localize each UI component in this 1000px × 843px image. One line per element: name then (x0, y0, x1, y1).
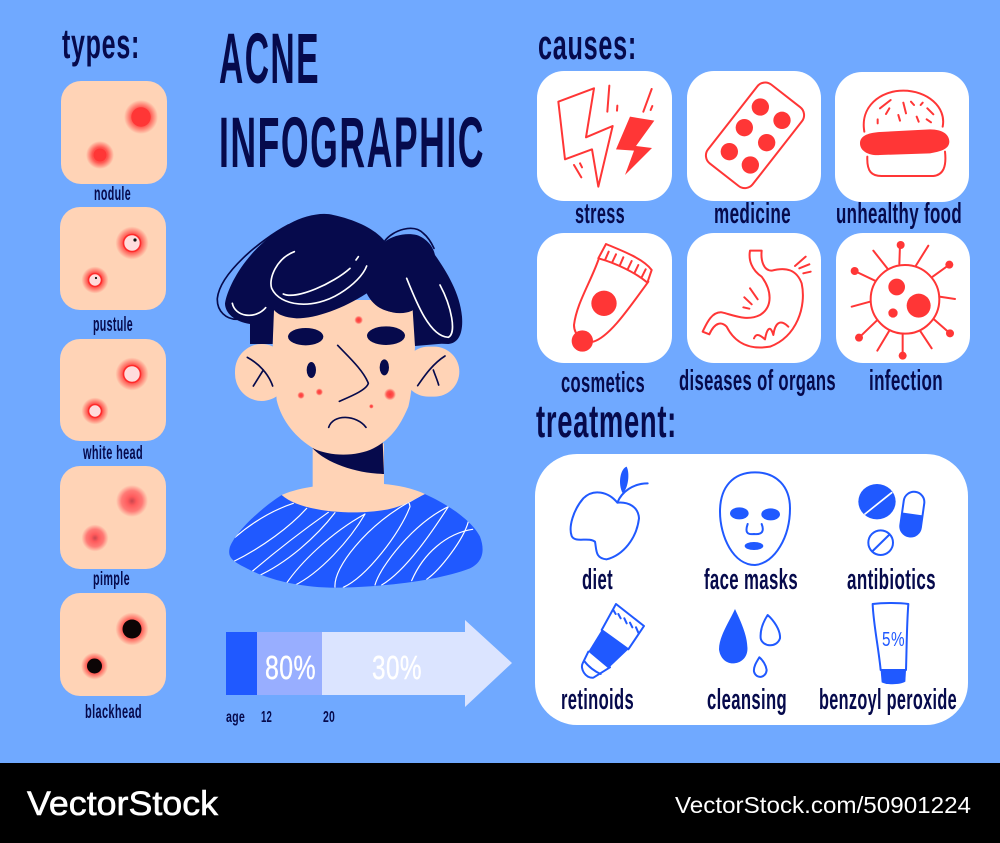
segment under 12 (226, 632, 257, 695)
neck and shoulders (282, 443, 425, 512)
panel: pustule (60, 207, 166, 336)
percent labels (265, 649, 422, 686)
icon: diet: diet (582, 564, 613, 596)
panel: blackhead (60, 593, 166, 723)
panel: cosmetics (537, 233, 672, 399)
icon: face masks: face masks (704, 564, 798, 596)
shirt (229, 493, 483, 588)
panel: pimple: pimple (93, 569, 130, 590)
icon: face masks (704, 472, 798, 596)
ears (235, 344, 459, 401)
panel: unhealthy food (835, 72, 969, 230)
percent labels: 80% (265, 649, 316, 686)
panel: stress (537, 71, 672, 230)
nose, mouth, ear lines (247, 345, 445, 427)
icon: antibiotics: antibiotics (847, 564, 936, 596)
age axis labels: age (226, 709, 245, 726)
icon: cleansing (707, 609, 787, 716)
panel: nodule: nodule (94, 184, 131, 205)
icon: benzoyl peroxide (819, 603, 957, 716)
footer bar: VectorStock (27, 785, 219, 823)
panel: diseases of organs: diseases of organs (679, 365, 836, 397)
heading: types: types: (62, 20, 140, 67)
title: INFOGRAPHIC (219, 104, 485, 183)
icon: retinoids (561, 604, 644, 716)
icon: benzoyl peroxide: 5% (882, 629, 905, 651)
panel: stress: stress (575, 198, 625, 230)
icon: retinoids: retinoids (561, 684, 634, 716)
panel: infection (836, 233, 970, 397)
age axis labels: 12 (261, 709, 272, 726)
panel: medicine (687, 71, 821, 230)
hair outlines (217, 225, 434, 319)
panel: pustule: pustule (93, 314, 133, 336)
panel: treatment (535, 454, 968, 725)
character illustration (217, 214, 483, 588)
panel: diseases of organs (679, 233, 836, 397)
icon: antibiotics (847, 484, 936, 596)
face (273, 300, 415, 455)
panel: pimple (60, 466, 166, 590)
panel: cosmetics: cosmetics (561, 367, 645, 399)
title (219, 20, 485, 183)
acne spots (297, 316, 396, 409)
percent labels: 30% (372, 649, 422, 686)
icon: cleansing: cleansing (707, 684, 787, 716)
footer bar (0, 763, 1000, 843)
age axis labels: 20 (323, 709, 335, 726)
age arrow chart (226, 620, 512, 726)
panel: nodule (61, 81, 167, 205)
panel: infection: infection (869, 365, 943, 397)
footer bar: VectorStock.com/50901224 (675, 792, 971, 818)
neck shadow (313, 442, 384, 474)
age axis labels (226, 709, 335, 726)
heading: treatment: treatment: (536, 395, 677, 447)
hair (225, 214, 462, 346)
hair highlights (232, 252, 452, 337)
panel: white head: white head (82, 443, 143, 464)
title: ACNE (219, 20, 320, 99)
panel: blackhead: blackhead (85, 702, 142, 723)
panel: white head (60, 339, 166, 464)
segment 12 to 20 (257, 632, 322, 695)
arrow pale segment (322, 620, 512, 707)
panel: medicine: medicine (714, 198, 791, 230)
heading: causes: causes: (538, 21, 637, 68)
icon: diet (571, 467, 648, 596)
eyebrows and eyes (288, 326, 405, 378)
